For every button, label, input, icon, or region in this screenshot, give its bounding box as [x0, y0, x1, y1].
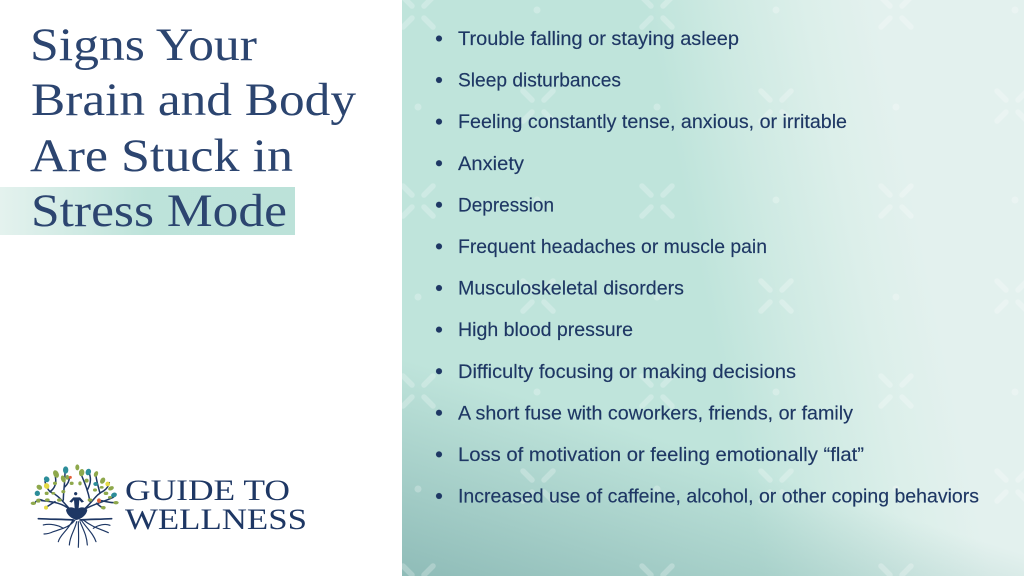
bullet list of stress signs: Frequent headaches or muscle pain	[458, 236, 767, 258]
title	[30, 19, 357, 237]
bullet list of stress signs: Sleep disturbances	[458, 70, 621, 92]
bullet list of stress signs: Musculoskeletal disorders	[458, 278, 684, 300]
panel: white left column	[0, 0, 402, 576]
bullet list of stress signs: Anxiety	[458, 153, 524, 175]
title: Are Stuck in	[30, 130, 293, 182]
title: Brain and Body	[31, 74, 357, 126]
bullet list of stress signs: A short fuse with coworkers, friends, or family	[458, 402, 853, 424]
title: Stress Mode	[31, 185, 287, 237]
bullet list of stress signs: Feeling constantly tense, anxious, or irritable	[458, 111, 847, 133]
icon: tree with meditating figure	[31, 464, 119, 547]
logo wordmark	[125, 474, 307, 536]
highlight bar behind Stress Mode	[0, 187, 295, 235]
panel: teal gradient background	[402, 0, 1024, 576]
logo wordmark: WELLNESS	[125, 503, 307, 536]
logo wordmark: GUIDE TO	[125, 474, 290, 507]
icon: leaves	[31, 464, 119, 510]
bullet list of stress signs: Loss of motivation or feeling emotionally “flat”	[458, 444, 864, 466]
icon: meditating figure	[66, 492, 87, 520]
bullet list of stress signs: Increased use of caffeine, alcohol, or other coping behaviors	[458, 486, 979, 508]
bullet list of stress signs: Trouble falling or staying asleep	[458, 28, 739, 50]
background pattern: crosses and dots	[403, 0, 1024, 576]
bullet list of stress signs: Depression	[458, 194, 554, 216]
logo: Guide to Wellness	[31, 464, 307, 547]
bullet list of stress signs	[436, 28, 979, 508]
title: Signs Your	[30, 19, 257, 71]
bullet list of stress signs: Difficulty focusing or making decisions	[458, 361, 796, 383]
bullet list of stress signs: High blood pressure	[458, 319, 633, 341]
